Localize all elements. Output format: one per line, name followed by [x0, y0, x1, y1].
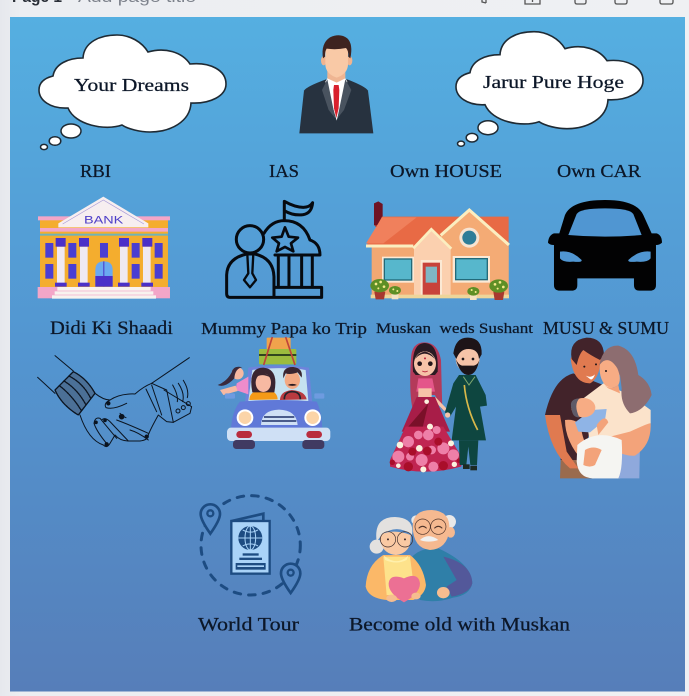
- label: RBI: RBI: [80, 161, 111, 181]
- label: Muskan weds Sushant: Muskan weds Sushant: [376, 321, 534, 337]
- groom: [445, 338, 487, 470]
- luggage on roof: [259, 337, 296, 365]
- icon: family road trip car: [218, 337, 330, 449]
- bride: [390, 342, 463, 472]
- location pin: [281, 564, 300, 593]
- father: [280, 367, 307, 400]
- bank door: [95, 261, 113, 287]
- mother: [249, 368, 278, 400]
- icon: bride and groom: [390, 338, 487, 472]
- bank windows: [45, 243, 163, 279]
- passport: [231, 514, 270, 574]
- father: [545, 338, 604, 478]
- icon: bank building: BANK: [84, 215, 124, 227]
- icon: black car front: [548, 200, 662, 291]
- thought cloud: Your Dreams: Your Dreams: [74, 75, 189, 95]
- label: Become old with Muskan: Become old with Muskan: [349, 616, 570, 636]
- car body: [231, 400, 322, 430]
- label: MUSU & SUMU: MUSU & SUMU: [543, 318, 669, 338]
- flowers on the lehenga: [390, 399, 461, 472]
- label: Own CAR: Own CAR: [557, 161, 641, 181]
- location pin: [201, 504, 220, 534]
- icon: wedding hands line art: [38, 356, 192, 447]
- icon: passport world tour: [201, 496, 300, 595]
- baby: [565, 398, 622, 478]
- car cabin: [245, 365, 312, 403]
- grandfather: [407, 510, 472, 601]
- heart: [389, 576, 420, 602]
- icon: IAS officer and government building: [227, 201, 322, 297]
- icon: businessman in suit: [299, 35, 373, 133]
- label: Didi Ki Shaadi: Didi Ki Shaadi: [50, 319, 173, 339]
- label: Mummy Papa ko Trip: Mummy Papa ko Trip: [201, 319, 367, 338]
- mother: [583, 346, 652, 478]
- bank columns: [55, 238, 153, 287]
- icon: couple with baby: [545, 338, 652, 478]
- thought cloud: Your Dreams: [39, 35, 226, 150]
- plants: [370, 279, 508, 300]
- icon: house: [366, 201, 509, 300]
- label: IAS: IAS: [269, 161, 299, 181]
- bangles: [55, 372, 95, 415]
- icon: bank building: [38, 197, 170, 299]
- label: World Tour: World Tour: [198, 616, 299, 636]
- label: Own HOUSE: Own HOUSE: [390, 161, 502, 181]
- thought cloud: Jarur Pure Hoge: Jarur Pure Hoge: [483, 72, 624, 92]
- girl leaning out: [218, 367, 248, 395]
- thought cloud: Jarur Pure Hoge: [456, 32, 643, 146]
- icon: elderly couple with heart: [366, 510, 472, 602]
- grandmother: [366, 517, 426, 602]
- headlights: [237, 409, 253, 426]
